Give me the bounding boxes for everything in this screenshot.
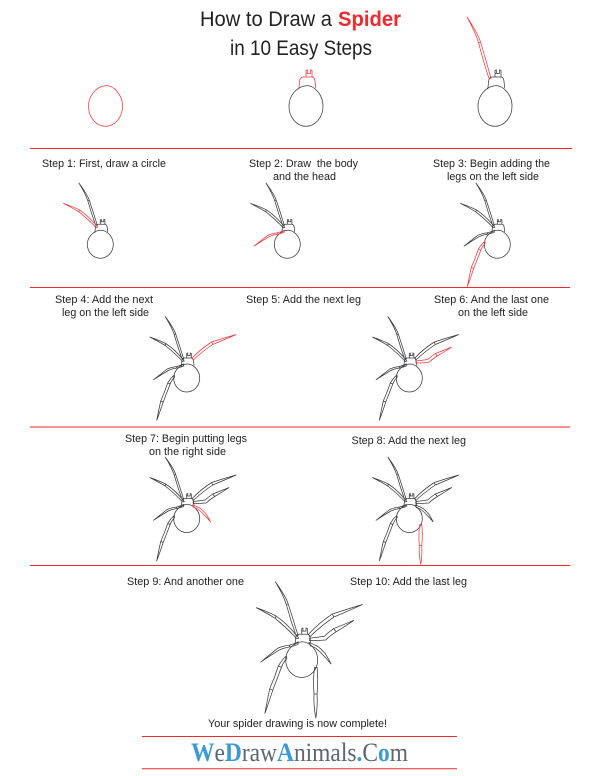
drawing: third left leg [250, 183, 300, 258]
step 3 caption: Step 3: Begin adding the [433, 158, 550, 170]
step 7 caption: Step 7: Begin putting legs [125, 433, 247, 445]
drawing: second right leg [372, 316, 459, 420]
drawing: second left leg [63, 183, 113, 258]
step 10 caption: Step 10: Add the last leg [350, 576, 467, 588]
drawing: body and head [289, 70, 323, 126]
step 4 caption: Step 4: Add the next [55, 294, 153, 306]
step 2 caption: Step 2: Draw the body [249, 158, 358, 170]
drawing: fourth right leg [372, 457, 459, 564]
drawing: circle start [88, 86, 123, 126]
logo wordmark: WeDrawAnimals.Com [191, 738, 408, 767]
step 6 caption: on the left side [458, 307, 528, 319]
step 6 caption: Step 6: And the last one [434, 294, 549, 306]
step 4 caption [55, 294, 153, 319]
step 7 caption [125, 433, 247, 458]
drawing: completed spider [256, 582, 363, 718]
completion caption: Your spider drawing is now complete! [208, 718, 387, 730]
step 3 caption: legs on the left side [447, 171, 539, 183]
step 8 caption: Step 8: Add the next leg [352, 435, 466, 447]
step 5 caption: Step 5: Add the next leg [246, 294, 361, 306]
step 2 caption: and the head [273, 171, 336, 183]
drawing: third right leg [150, 457, 236, 561]
title: in 10 Easy Steps [230, 37, 372, 60]
drawing: fourth left leg [460, 183, 510, 287]
step 7 caption: on the right side [149, 446, 226, 458]
step 2 caption [249, 158, 358, 183]
drawing: first right leg [150, 316, 236, 420]
step 3 caption [433, 158, 550, 183]
step 4 caption: leg on the left side [62, 307, 149, 319]
title [200, 8, 401, 60]
title: How to Draw a [200, 8, 332, 31]
drawing: first left leg [467, 17, 512, 126]
title: Spider [338, 8, 401, 31]
step 6 caption [434, 294, 549, 319]
step 1 caption: Step 1: First, draw a circle [42, 158, 166, 170]
step 9 caption: Step 9: And another one [127, 576, 244, 588]
